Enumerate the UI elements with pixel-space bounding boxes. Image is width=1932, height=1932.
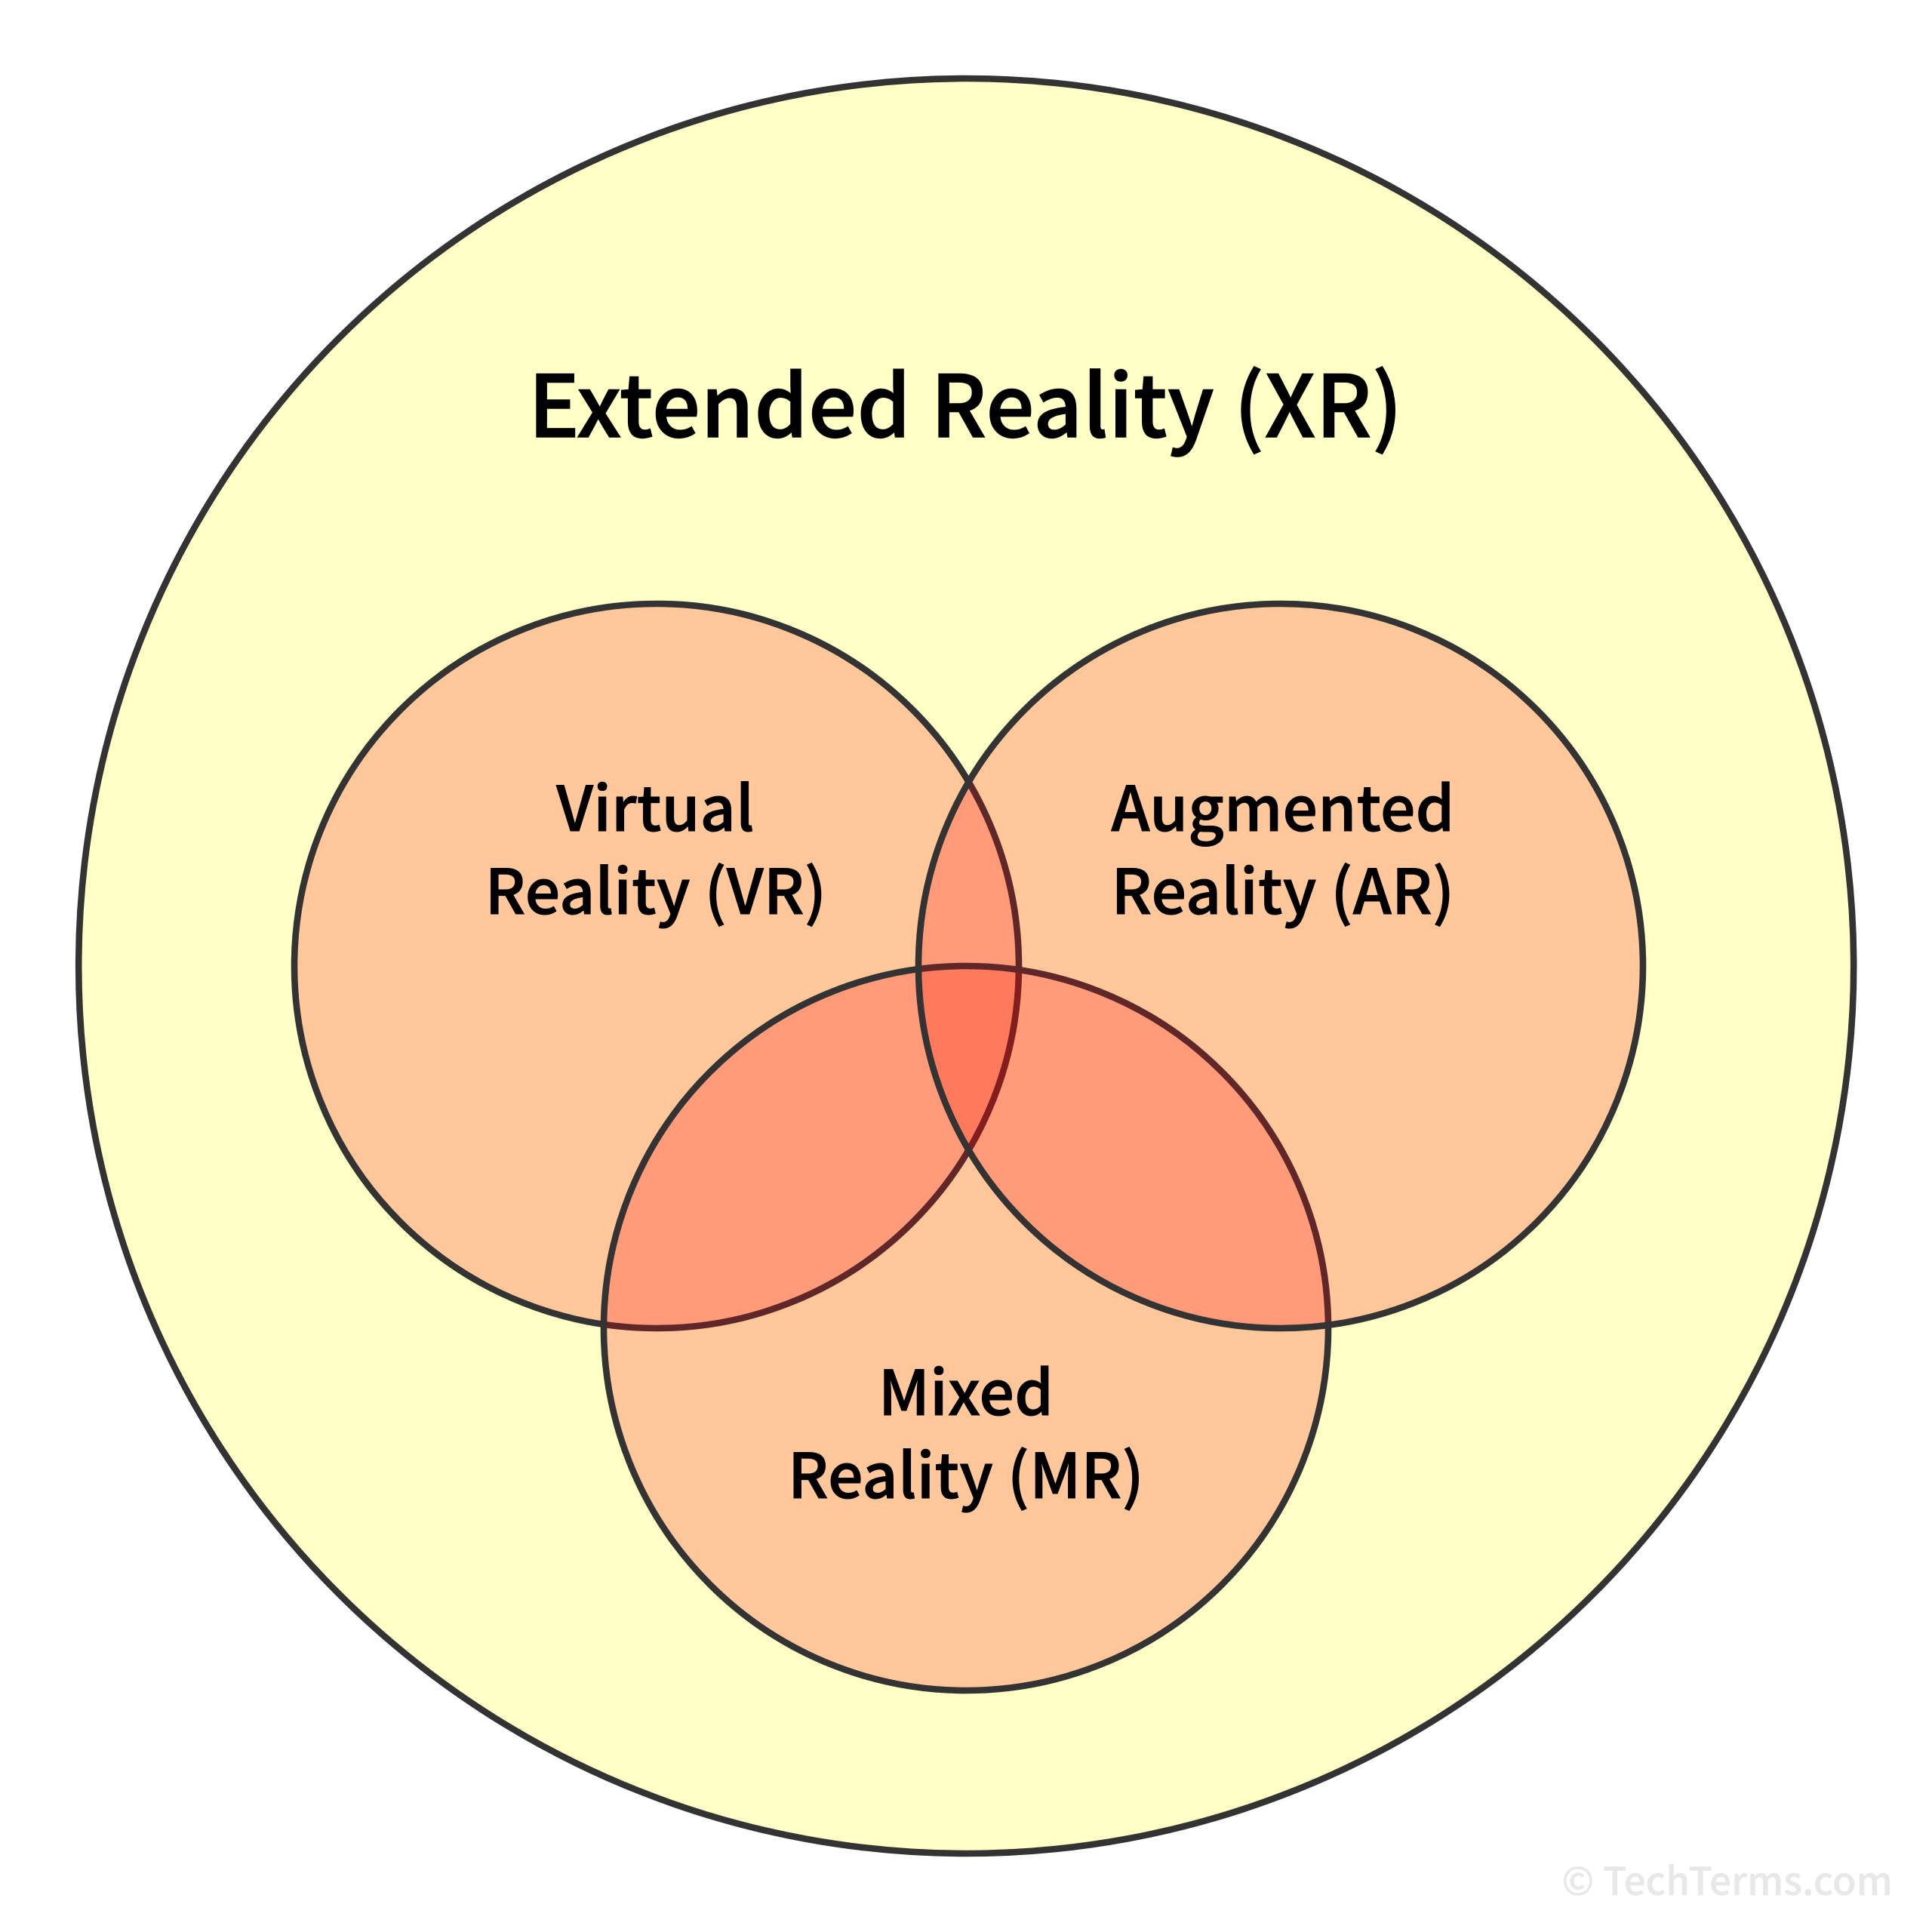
label: Mixed Reality (MR): Mixed xyxy=(878,1343,1054,1433)
circle: Virtual Reality xyxy=(294,604,1019,1328)
watermark: TechTerms.com: © TechTerms.com xyxy=(1562,1850,1893,1906)
label: Augmented Reality (AR) xyxy=(1111,759,1455,932)
label: Mixed Reality (MR): Reality (MR) xyxy=(788,1426,1144,1516)
label: Augmented Reality (AR): Reality (AR) xyxy=(1112,842,1454,932)
label: Augmented Reality (AR): Augmented xyxy=(1111,759,1455,849)
circle: Mixed Reality xyxy=(604,966,1328,1690)
circle: Augmented Reality xyxy=(918,604,1643,1328)
label: Virtual Reality (VR) xyxy=(485,759,826,932)
label: Virtual Reality (VR): Virtual xyxy=(555,759,755,849)
title: Extended Reality (XR): Extended Reality (XR) xyxy=(528,338,1403,462)
label: Virtual Reality (VR): Reality (VR) xyxy=(485,842,826,932)
label: Mixed Reality (MR) xyxy=(788,1343,1144,1516)
